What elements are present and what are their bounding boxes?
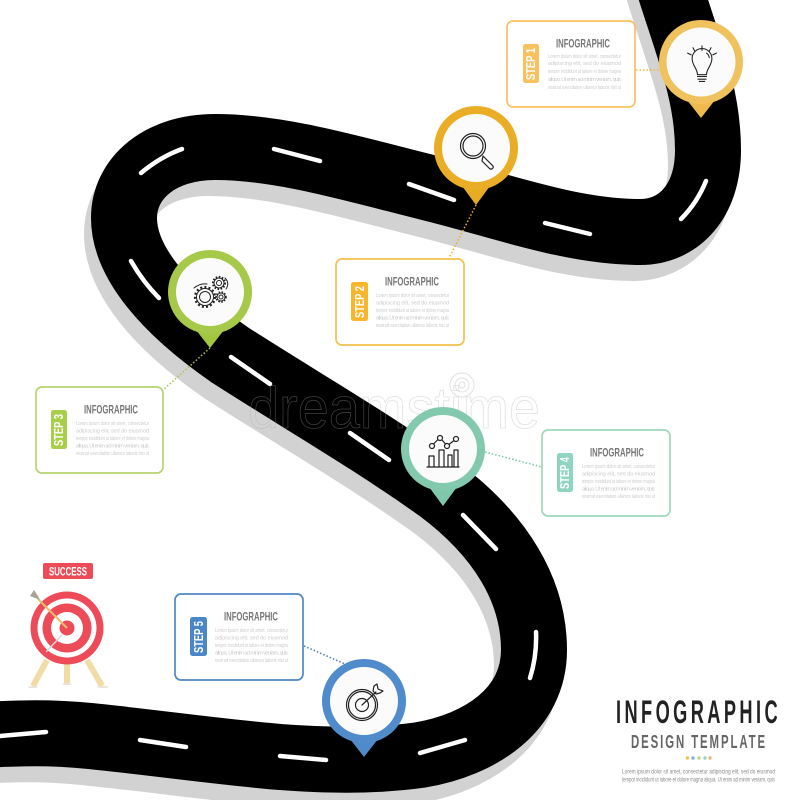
panel: step 3: nostrud exercitation ullamco laboris nisi ut [76,451,149,457]
panel: step 2: aliqua. Ut enim ad minim veniam, quis [376,316,449,322]
step 4 tag [557,453,573,492]
panel: step 5: adipiscing elit, sed do eiusmod [215,636,288,642]
panel: step 4: Lorem ipsum dolor sit amet, consectetur [582,464,655,470]
connector: step 2 [449,205,476,258]
panel: step 2: tempor incididunt ut labore et dolore magna [376,308,450,314]
panel: step 3: adipiscing elit, sed do eiusmod [76,428,149,434]
panel: step 4: STEP 4 [557,456,572,489]
pin: step 2 magnifier [434,106,518,205]
pin: step 4 chart [401,407,485,506]
panel: step 5: aliqua. Ut enim ad minim veniam, quis [215,650,288,656]
panel: step 1: STEP 1 [523,48,538,80]
icon: magnifier [460,134,493,169]
icon: success target [28,590,109,688]
connector: step 4 [485,452,542,467]
panel: step 1: aliqua. Ut enim ad minim veniam, quis [548,77,621,83]
panel: step 2: Lorem ipsum dolor sit amet, consectetur [376,293,449,299]
panel: step 1 [507,21,635,107]
panel: step 1: nostrud exercitation ullamco laboris nisi ut [548,85,621,91]
panel: step 2: STEP 2 [352,286,367,318]
panel: step 2 [336,259,464,345]
panel: step 1: adipiscing elit, sed do eiusmod [548,61,621,67]
footer text [622,770,775,784]
icon: lightbulb [688,46,716,81]
panel: step 1: INFOGRAPHIC [556,36,610,50]
panel: step 3: Lorem ipsum dolor sit amet, consectetur [76,421,149,427]
step 1 tag [523,44,539,83]
panel: step 5 [175,594,303,680]
panel: step 4: aliqua. Ut enim ad minim veniam, quis [582,486,655,492]
step 5 tag [190,617,207,656]
connector: step 5 [304,646,345,664]
badge: success: SUCCESS [49,564,87,578]
panel: step 5: STEP 5 [191,621,206,653]
pin: step 5 target [322,659,406,757]
icon: target [346,684,383,720]
connector: step 3 [163,348,210,390]
pin: step 3 gears [168,250,252,348]
icon: gears [194,277,228,307]
pin: step 1 lightbulb [659,20,743,118]
panel: step 3: INFOGRAPHIC [84,402,138,416]
panel: step 2: nostrud exercitation ullamco laboris nisi ut [376,323,449,329]
panel: step 5: tempor incididunt ut labore et dolore magna [215,643,289,649]
panel: step 3: tempor incididunt ut labore et dolore magna [76,436,150,442]
panel: step 3 [36,387,163,473]
panel: step 4: nostrud exercitation ullamco laboris nisi ut [582,494,655,500]
panel: step 3: STEP 3 [51,414,66,446]
panel: step 5: INFOGRAPHIC [224,610,278,624]
watermark: dreamstime [248,376,540,441]
panel: step 4 [542,430,670,516]
panel: step 1: Lorem ipsum dolor sit amet, consectetur [548,54,621,60]
panel: step 4: adipiscing elit, sed do eiusmod [582,472,655,478]
icon: bar chart [427,436,459,467]
panel: step 5: nostrud exercitation ullamco laboris nisi ut [215,658,288,664]
badge: success [43,563,93,579]
panel: step 3: aliqua. Ut enim ad minim veniam, quis [76,444,149,450]
connector: step 1 [636,69,660,71]
step 2 tag [351,282,368,321]
panel: step 4: INFOGRAPHIC [590,446,644,460]
panel: step 5: Lorem ipsum dolor sit amet, consectetur [215,628,288,634]
arrow [38,599,67,628]
target rings [30,592,104,664]
panel: step 1: tempor incididunt ut labore et dolore magna [548,69,622,75]
panel: step 4: tempor incididunt ut labore et dolore magna [582,479,656,485]
panel: step 2: INFOGRAPHIC [385,274,439,288]
panel: step 2: adipiscing elit, sed do eiusmod [376,300,449,306]
step 3 tag [51,410,67,449]
colour dots [686,756,712,760]
target stand [33,660,102,686]
